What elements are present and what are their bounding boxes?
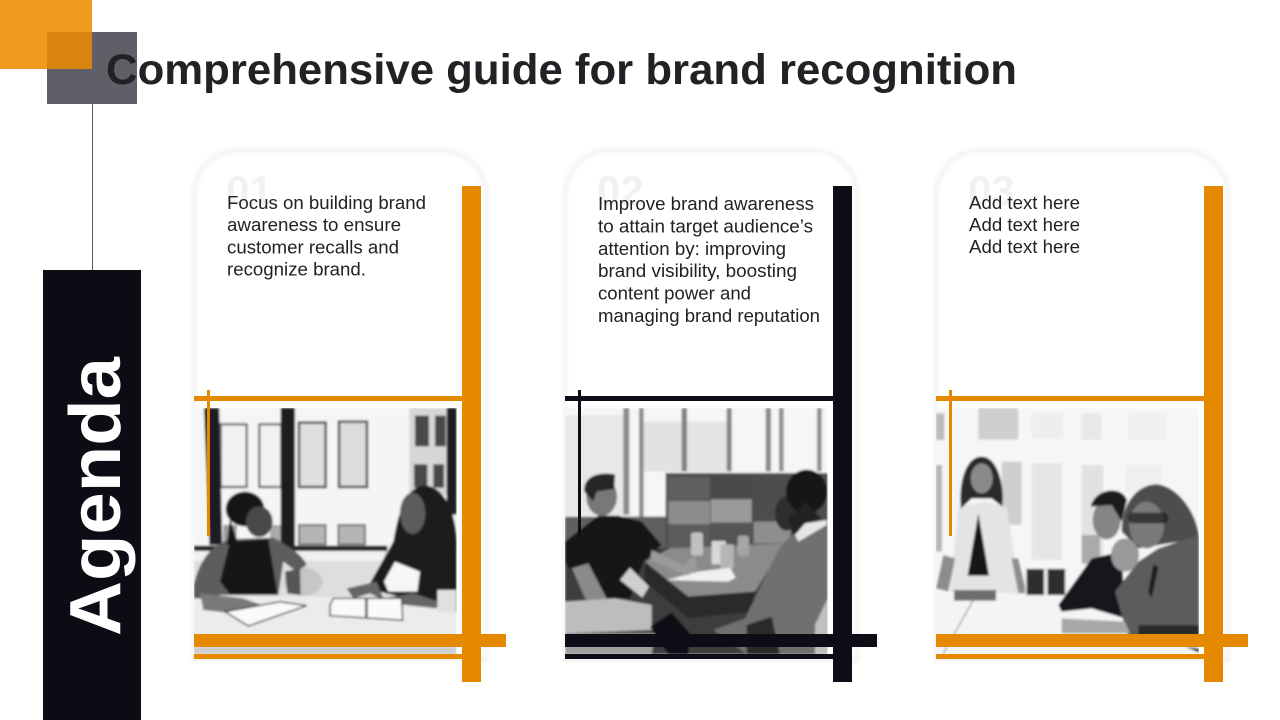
small vertical line — [578, 390, 581, 536]
decorative square: orange — [0, 0, 92, 69]
number 01: 01 — [226, 167, 273, 214]
agenda side panel — [43, 270, 141, 720]
lower horizontal line — [936, 654, 1204, 659]
card background — [565, 150, 857, 660]
decorative square: grey — [47, 32, 137, 104]
small vertical line — [207, 390, 210, 536]
card 3 text: Add text here — [969, 215, 1080, 236]
small vertical line — [949, 390, 952, 536]
card 2 text: content power and — [598, 284, 751, 304]
card 3 text: Add text here — [969, 237, 1080, 258]
card 2 text: managing brand reputation — [598, 306, 820, 327]
card 2 text: to attain target audience’s — [598, 216, 813, 238]
panel: card 1 — [194, 150, 506, 682]
upper horizontal line — [936, 396, 1204, 401]
vertical accent bar — [1204, 186, 1223, 682]
card background — [194, 150, 486, 660]
lower horizontal line — [194, 654, 462, 659]
card 2 text: attention by: improving — [598, 239, 786, 260]
card background — [936, 150, 1228, 660]
card 1 text: Focus on building brand — [227, 193, 426, 214]
decorative square overlap — [47, 32, 92, 69]
wide horizontal bar — [936, 634, 1248, 647]
upper horizontal line — [194, 396, 462, 401]
card 2 text: brand visibility, boosting — [598, 261, 797, 282]
title: Comprehensive guide for brand recognition — [106, 46, 1017, 94]
connector line — [92, 104, 93, 270]
card 2 text: Improve brand awareness — [598, 194, 814, 215]
lower horizontal line — [565, 654, 833, 659]
upper horizontal line — [565, 396, 833, 401]
wide horizontal bar — [194, 634, 506, 647]
card 3 text: Add text here — [969, 193, 1080, 214]
number 02: 02 — [597, 167, 644, 214]
photo: two women at a table — [194, 408, 457, 654]
panel: card 3 — [936, 150, 1248, 682]
vertical accent bar — [833, 186, 852, 682]
photo: two men in conversation — [565, 408, 828, 654]
card 1 text: customer recalls and — [227, 238, 399, 258]
number 03: 03 — [968, 167, 1015, 214]
card 1 text: recognize brand. — [227, 260, 366, 280]
wide horizontal bar — [565, 634, 877, 647]
agenda label: Agenda — [56, 356, 136, 636]
panel: card 2 — [565, 150, 877, 682]
card 1 text: awareness to ensure — [227, 215, 401, 236]
photo: three women at a meeting — [936, 408, 1199, 654]
vertical accent bar — [462, 186, 481, 682]
